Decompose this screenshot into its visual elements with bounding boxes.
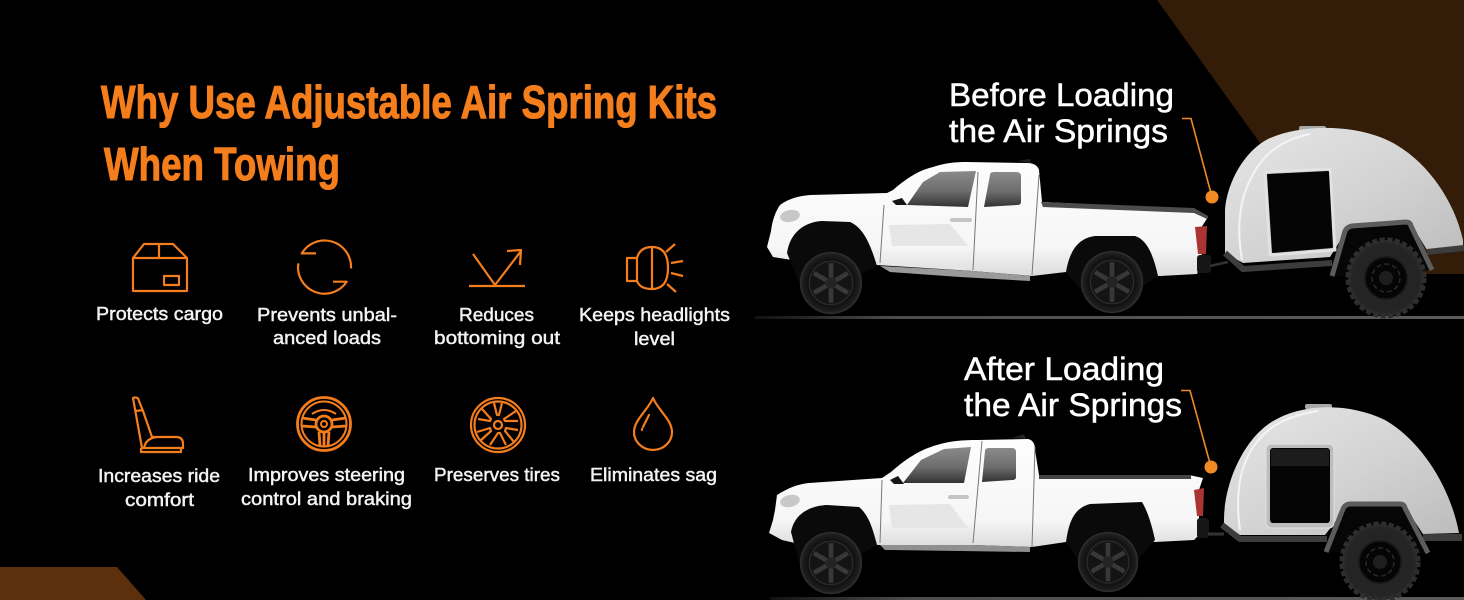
door window [1270,448,1330,523]
label [98,466,220,510]
roof fin [1017,159,1031,163]
door seams [880,172,1039,275]
label: Improves steering [248,465,405,485]
door seams [880,441,1035,547]
wheel well [1326,504,1428,553]
shell [1224,407,1459,535]
icon: circular arrows [298,240,351,294]
title: When Towing [104,138,340,190]
body shading [889,224,968,246]
label: Keeps headlights [579,305,730,325]
sill [880,266,1030,281]
rear bumper [1197,518,1209,538]
fender [1332,222,1432,276]
headlight [779,208,801,224]
hitch [1210,262,1228,266]
benefit: protects cargo [96,244,223,324]
wheel well [1333,223,1431,277]
rim highlight [1239,134,1310,260]
benefit: eliminates sag [590,398,717,485]
mirror [890,476,904,484]
door frame [1266,444,1334,528]
hitch [1208,532,1224,536]
frame [1222,525,1327,539]
front wheel [800,532,862,594]
benefit: keeps headlights level [579,244,730,349]
label: Protects cargo [96,304,223,324]
roof cap [1305,404,1332,409]
brown corner shape: top right [1157,0,1464,274]
front fender arch [787,221,877,285]
wheel [1342,524,1418,600]
front wheel [800,252,862,314]
bed rail [1041,202,1208,219]
rim highlight [1238,411,1318,530]
rear fender arch [1066,502,1155,570]
bed rail [1039,475,1191,479]
frame [1225,253,1332,269]
front fender arch [791,505,877,566]
roof fin [1012,434,1026,439]
icon: bounce arrow [469,250,525,286]
door window [1268,172,1332,252]
label: comfort [125,490,194,510]
label: anced loads [273,328,381,348]
heading: after loading: After Loading [964,351,1164,387]
sill [880,545,1030,552]
label [257,305,397,348]
label [434,305,560,348]
title [101,76,717,190]
ground line: after [770,597,1464,600]
label: Prevents unbal- [257,305,397,325]
rear beam [1427,248,1464,252]
benefit: increases ride comfort [98,397,220,510]
label: Increases ride [98,466,220,486]
heading: after loading [964,351,1182,423]
front window [907,171,976,207]
label: bottoming out [434,328,560,348]
rear wheel [1078,532,1138,592]
benefit: improves steering control and braking [241,398,412,509]
heading: before loading: Before Loading [949,77,1174,113]
wheel [1348,240,1424,316]
door frame [1265,169,1335,255]
rear fender arch [1066,236,1158,295]
fender [1326,504,1428,553]
shell [1225,128,1463,263]
icon: cardboard box [133,244,187,291]
headlight [779,493,801,509]
vehicle: trailer before loading [1210,126,1464,316]
door window upper band [1271,449,1329,466]
label: Eliminates sag [590,465,717,485]
brown corner shape: bottom left [0,567,146,600]
vehicle: truck before loading [767,159,1211,314]
label: Preserves tires [434,465,560,485]
body shading [889,504,968,528]
icon: water drop [634,398,672,450]
door handle [950,218,972,222]
body [767,162,1208,276]
icon: steering wheel [298,398,350,450]
icon: headlight [627,244,683,292]
icon: seat [133,397,183,452]
icon: alloy wheel [471,398,525,452]
benefit: preserves tires [434,398,560,485]
heading: before loading [949,77,1174,149]
mirror [892,198,907,205]
label: control and braking [241,489,412,509]
tail light [1195,226,1207,254]
benefit: prevents unbalanced loads [257,240,397,348]
vehicle: trailer after loading [1208,404,1462,600]
roof cap [1299,126,1326,131]
door handle [948,495,969,499]
front window [903,447,971,483]
heading: after loading: the Air Springs [964,387,1182,423]
label [241,465,412,509]
rear wheel [1081,251,1143,313]
callout leader: before [1182,118,1218,204]
tail light [1194,488,1204,516]
callout leader: after [1181,390,1218,474]
rear bumper [1197,255,1211,273]
vehicle: truck after loading [769,434,1209,594]
heading: before loading: the Air Springs [949,113,1168,149]
rear window [982,448,1016,482]
ground line: before [755,316,1464,319]
title: Why Use Adjustable Air Spring Kits [101,76,717,128]
rear beam [1423,534,1462,541]
benefit: reduces bottoming out [434,250,560,348]
label [579,305,730,349]
label: Reduces [459,305,534,325]
body [769,439,1203,547]
label: level [634,329,675,349]
rear window [984,172,1021,207]
